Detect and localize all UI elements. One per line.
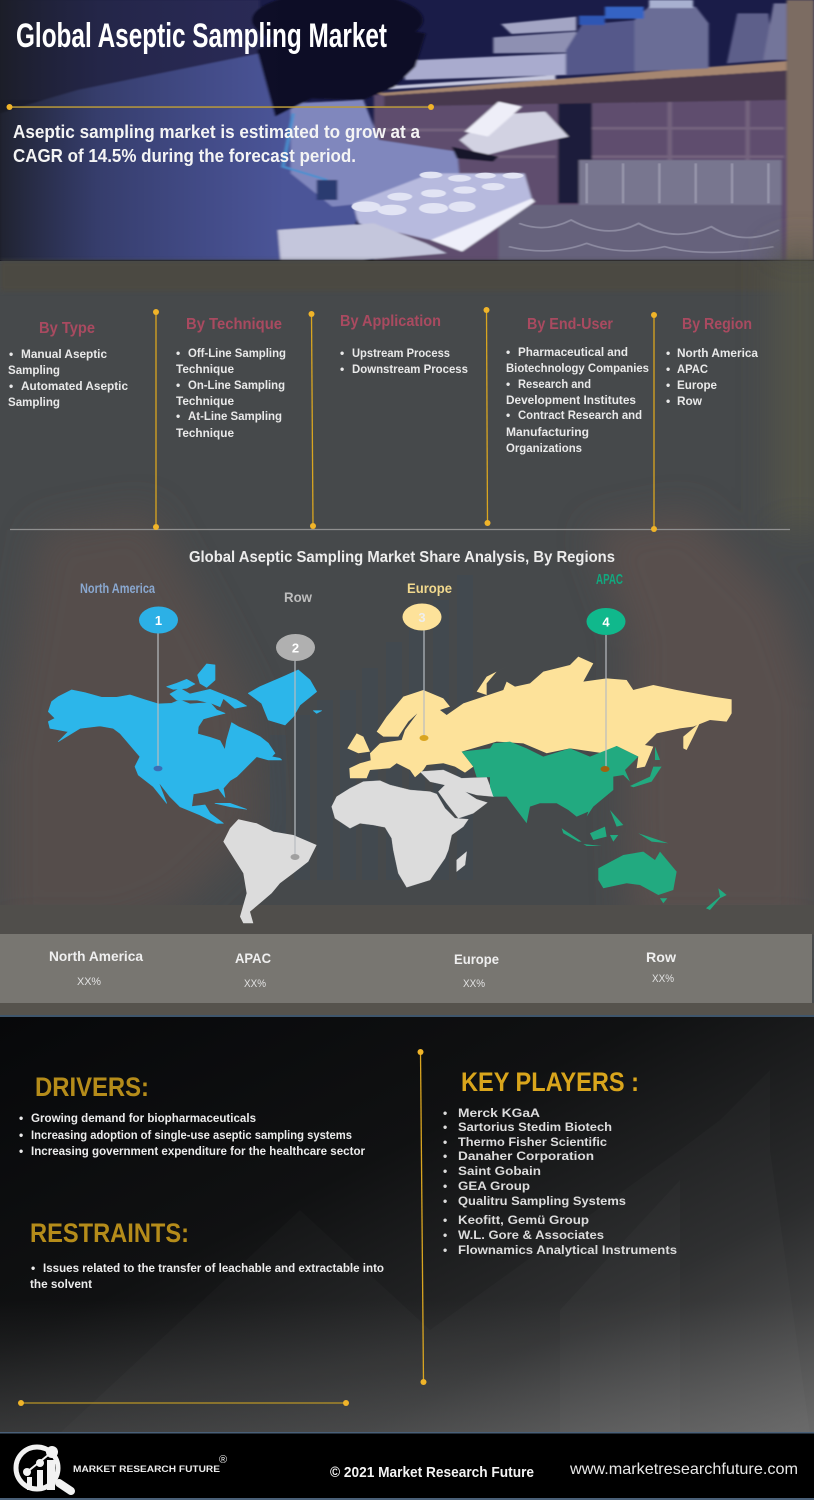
divider: lower gold line xyxy=(18,1400,349,1406)
pin 3: Europe xyxy=(402,604,442,630)
panel: By Type: • xyxy=(9,347,13,361)
stat: Europe: Europe xyxy=(454,951,499,967)
text block: restraints list: the solvent xyxy=(30,1277,92,1291)
divider: drivers vs key players xyxy=(418,1049,426,1385)
panel: By Technique: Technique xyxy=(176,394,234,408)
panel: By Application: • xyxy=(340,346,344,360)
text block: key players list: GEA Group xyxy=(458,1179,530,1193)
text block: CAGR statement: CAGR of 14.5% during the forecast period. xyxy=(13,146,356,166)
stat: APAC xyxy=(235,950,271,990)
icon: company logo xyxy=(16,1446,71,1491)
chart: world map by region xyxy=(48,571,732,923)
panel: hero photo background xyxy=(0,0,814,260)
panel: By Application xyxy=(340,313,468,376)
panel: By Application: Downstream Process xyxy=(352,362,468,376)
text block: key players list: W.L. Gore & Associates xyxy=(458,1228,604,1242)
map: South America xyxy=(223,819,317,923)
map: Asia Pacific xyxy=(462,742,727,910)
text: registered mark: ® xyxy=(219,1454,227,1466)
text block: key players list: Saint Gobain xyxy=(458,1164,541,1178)
text block: drivers list xyxy=(19,1111,365,1158)
pin 1: North America: 1 xyxy=(155,613,162,628)
text: company name: MARKET RESEARCH FUTURE xyxy=(73,1464,220,1475)
text: website: www.marketresearchfuture.com xyxy=(569,1461,798,1478)
text block: key players list: Qualitru Sampling Systems xyxy=(458,1194,626,1208)
label: Row: Row xyxy=(284,589,312,605)
panel: By Technique: Off-Line Sampling xyxy=(188,346,286,360)
panel: By Technique: Technique xyxy=(176,362,234,376)
text block: key players list: • xyxy=(443,1106,447,1120)
panel: By Technique: At-Line Sampling xyxy=(188,409,282,423)
pin dots xyxy=(154,735,610,860)
text block: drivers list: • xyxy=(19,1144,23,1158)
text block: key players list: Merck KGaA xyxy=(458,1106,540,1120)
panel: By Application: • xyxy=(340,362,344,376)
panel: By Region: By Region xyxy=(682,316,752,333)
panel: By End-User: By End-User xyxy=(527,316,613,333)
panel: By End-User: Contract Research and xyxy=(518,408,642,422)
text block: restraints list xyxy=(30,1261,384,1291)
stat: Row: Row xyxy=(646,949,676,965)
panel: By Region: Europe xyxy=(677,378,717,392)
panel: By End-User: Manufacturing xyxy=(506,425,589,439)
panel: By Technique: By Technique xyxy=(186,316,282,333)
heading: map title: Global Aseptic Sampling Market Share Analysis, By Regions xyxy=(189,549,615,566)
label: North America: North America xyxy=(80,580,155,596)
panel: By End-User: • xyxy=(506,345,510,359)
text block: key players list: Sartorius Stedim Biotech xyxy=(458,1120,612,1134)
panel: By End-User: Research and xyxy=(518,377,591,391)
panel: By End-User: Organizations xyxy=(506,441,582,455)
stat: Row: XX% xyxy=(652,973,674,985)
text block: key players list: Thermo Fisher Scientific xyxy=(458,1135,607,1149)
text block: drivers list: • xyxy=(19,1111,23,1125)
panel: segmentation and map background xyxy=(0,250,814,1015)
panel: By Type: Sampling xyxy=(8,363,60,377)
text block: key players list: • xyxy=(443,1120,447,1134)
panel: By Technique: • xyxy=(176,409,180,423)
text block: key players list: Danaher Corporation xyxy=(458,1149,594,1163)
text block: drivers list: Increasing government expenditure for the healthcare sector xyxy=(31,1144,365,1158)
panel: By Region: • xyxy=(666,378,670,392)
panel: By Type: Manual Aseptic xyxy=(21,347,107,361)
panel: By Region xyxy=(666,316,758,408)
text block: restraints list: • xyxy=(31,1261,35,1275)
panel: By End-User: Development Institutes xyxy=(506,393,636,407)
stat: North America: XX% xyxy=(77,976,101,988)
panel: By Region: North America xyxy=(677,346,758,360)
text block: drivers list: • xyxy=(19,1128,23,1142)
text block: key players list: • xyxy=(443,1179,447,1193)
panel: By Technique: • xyxy=(176,378,180,392)
text block: key players list: • xyxy=(443,1135,447,1149)
panel: By End-User: Biotechnology Companies xyxy=(506,361,649,375)
panel: By End-User xyxy=(506,316,649,455)
panel: By End-User: • xyxy=(506,408,510,422)
heading: restraints: RESTRAINTS: xyxy=(30,1218,189,1248)
panel: By Technique: On-Line Sampling xyxy=(188,378,285,392)
label: Europe: Europe xyxy=(407,580,452,596)
map: Africa and Middle East xyxy=(332,770,494,887)
panel: By Technique: Technique xyxy=(176,426,234,440)
panel: By Type: Automated Aseptic xyxy=(21,379,128,393)
pin 2: Row: 2 xyxy=(292,640,299,656)
text block: drivers list: Growing demand for biopharmaceuticals xyxy=(31,1111,256,1125)
text block: key players list: • xyxy=(443,1194,447,1208)
text block: key players list: • xyxy=(443,1228,447,1242)
pin 1: North America xyxy=(139,606,178,634)
panel: regional shares band xyxy=(0,934,814,1015)
text block: restraints list: Issues related to the transfer of leachable and extractable into xyxy=(43,1261,384,1275)
title: Global Aseptic Sampling Market xyxy=(16,17,387,55)
heading: drivers: DRIVERS: xyxy=(35,1072,149,1102)
text block: key players list: Keofitt, Gemü Group xyxy=(458,1213,589,1227)
panel: By Region: • xyxy=(666,394,670,408)
panel: By Type xyxy=(8,320,128,409)
stat: Row xyxy=(646,949,676,985)
stat: North America xyxy=(49,948,143,988)
text block: key players list xyxy=(443,1106,677,1257)
panel: By Type: • xyxy=(9,379,13,393)
text block: key players list: • xyxy=(443,1164,447,1178)
text block: drivers list: Increasing adoption of single-use aseptic sampling systems xyxy=(31,1128,352,1142)
panel: By End-User: Pharmaceutical and xyxy=(518,345,628,359)
text block: key players list: Flownamics Analytical Instruments xyxy=(458,1243,677,1257)
stat: North America: North America xyxy=(49,948,143,964)
panel: By Region: Row xyxy=(677,394,703,408)
pin 4: APAC: 4 xyxy=(602,614,610,630)
panel: By Technique xyxy=(176,316,286,440)
text block: CAGR statement xyxy=(13,122,421,166)
stat: APAC: XX% xyxy=(244,978,266,990)
stat: APAC: APAC xyxy=(235,950,271,966)
heading: key players: KEY PLAYERS : xyxy=(461,1067,639,1097)
pin 4: APAC xyxy=(586,608,626,635)
text: copyright: © 2021 Market Research Future xyxy=(330,1464,534,1481)
panel: By Region: • xyxy=(666,362,670,376)
pin lines xyxy=(158,630,606,857)
stat: Europe: XX% xyxy=(463,978,485,990)
panel: By Region: APAC xyxy=(677,362,708,376)
panel: By Type: By Type xyxy=(39,320,95,337)
panel: hero gold divider line xyxy=(6,104,434,110)
map: Europe and Russia xyxy=(347,657,732,778)
panel: By Region: • xyxy=(666,346,670,360)
stat: Europe xyxy=(454,951,499,990)
label: APAC: APAC xyxy=(596,571,623,588)
panel: By End-User: • xyxy=(506,377,510,391)
panel: By Technique: • xyxy=(176,346,180,360)
panel: By Application: By Application xyxy=(340,313,441,330)
text block: key players list: • xyxy=(443,1243,447,1257)
map: North America xyxy=(48,664,322,823)
panel: drivers, restraints and key players background xyxy=(0,1015,814,1433)
pin 2: Row xyxy=(276,634,315,661)
pin 3: Europe: 3 xyxy=(418,610,426,625)
text block: CAGR statement: Aseptic sampling market is estimated to grow at a xyxy=(13,122,421,142)
text block: key players list: • xyxy=(443,1149,447,1163)
column dividers xyxy=(10,307,790,532)
text block: key players list: • xyxy=(443,1213,447,1227)
panel: By Type: Sampling xyxy=(8,395,60,409)
panel: footer xyxy=(0,1432,814,1500)
panel: By Application: Upstream Process xyxy=(352,346,450,360)
